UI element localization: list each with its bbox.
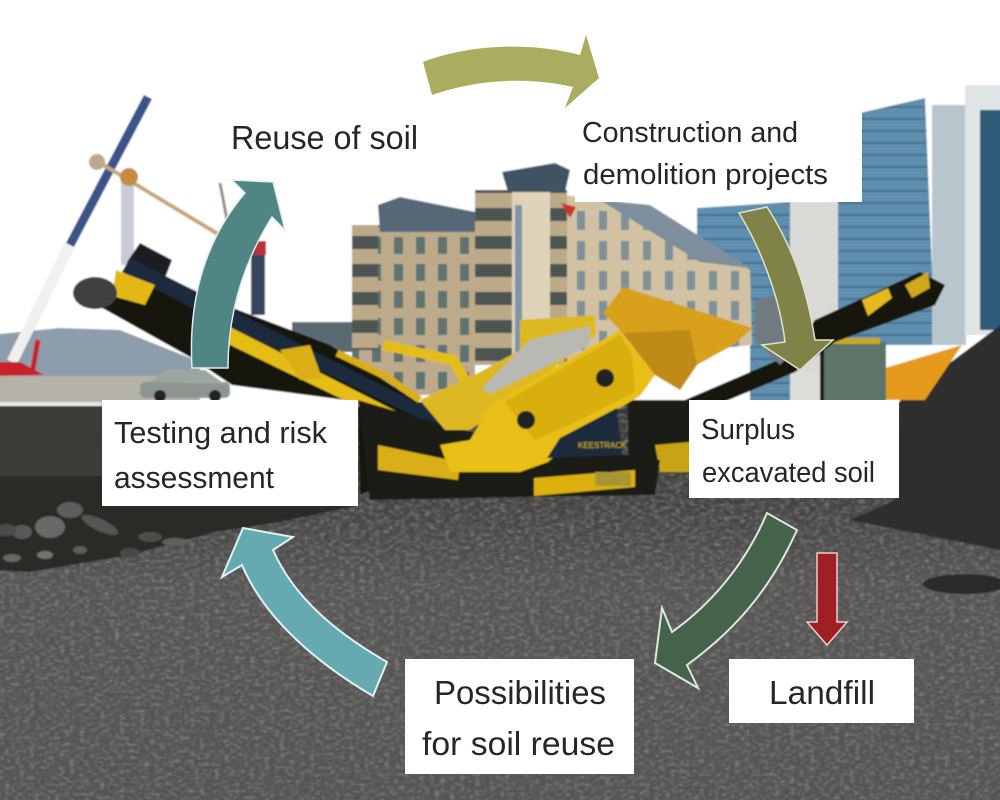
box: testing and risk assessment: Testing and risk bbox=[114, 415, 327, 450]
puddle bbox=[923, 574, 1000, 594]
low building behind conveyor bbox=[292, 322, 352, 352]
tower crane bbox=[89, 154, 228, 265]
box: possibilities for soil reuse: for soil reuse bbox=[422, 725, 615, 762]
box: surplus excavated soil: Surplus bbox=[701, 414, 795, 446]
left background building bbox=[0, 328, 200, 402]
car bbox=[140, 370, 230, 402]
building left bbox=[352, 197, 475, 395]
crusher body bbox=[337, 287, 753, 472]
rubble pile left bbox=[0, 402, 360, 572]
box: possibilities for soil reuse bbox=[405, 659, 634, 774]
arrow: surplus soil to possibilities bbox=[655, 513, 797, 688]
arrow: construction to surplus soil bbox=[739, 207, 833, 370]
box: landfill: Landfill bbox=[769, 674, 875, 711]
right conveyor bbox=[628, 272, 945, 472]
arrow: surplus soil to landfill bbox=[807, 553, 847, 645]
ground bbox=[0, 402, 1000, 800]
arrow: possibilities to testing bbox=[222, 528, 387, 696]
box: possibilities for soil reuse: Possibilities bbox=[434, 674, 606, 711]
box: testing and risk assessment: assessment bbox=[114, 460, 274, 495]
sky bbox=[0, 0, 1000, 410]
heading: reuse of soil: Reuse of soil bbox=[231, 119, 418, 156]
arrow: reuse to construction bbox=[423, 35, 599, 108]
box: surplus excavated soil: excavated soil bbox=[702, 457, 875, 489]
crusher body: KEESTRACK bbox=[578, 441, 627, 450]
blue building behind bbox=[697, 202, 792, 402]
heading: construction and demolition projects: Construction and bbox=[582, 117, 798, 149]
office towers bbox=[790, 85, 1000, 400]
mast bbox=[251, 241, 266, 315]
white backing for heading: construction bbox=[575, 105, 862, 202]
tracks and under-chassis bbox=[358, 400, 660, 500]
mobile crane bbox=[0, 97, 148, 376]
arrow: testing to reuse bbox=[191, 180, 285, 368]
heading: construction and demolition projects: demolition projects bbox=[583, 159, 828, 191]
heading: construction and demolition projects bbox=[582, 117, 828, 191]
box: landfill bbox=[729, 659, 914, 723]
left conveyor bbox=[73, 243, 460, 495]
dark soil pile right bbox=[850, 318, 1000, 552]
box: testing and risk assessment bbox=[102, 400, 358, 506]
building centre bbox=[475, 163, 752, 365]
excavator behind bbox=[790, 338, 962, 402]
box: surplus excavated soil bbox=[689, 400, 899, 498]
